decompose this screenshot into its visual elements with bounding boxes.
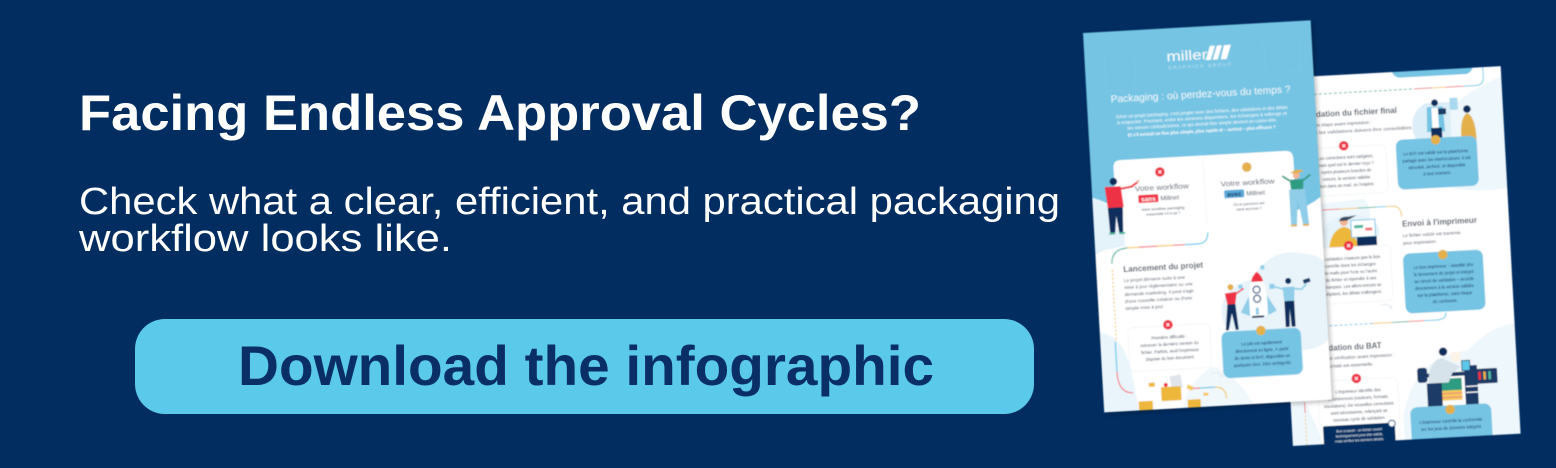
label: sans Millnet: Millnet: [1160, 194, 1180, 202]
arrow: [1210, 372, 1222, 377]
pale blobs: [1092, 196, 1125, 255]
section: lancement du projet: simple mise à jour.: [1125, 304, 1164, 311]
section: envoi a l'imprimeur: Le fichier validé est transmis: [1403, 230, 1461, 238]
section: validation du fichier final: toutes les validations doivent être consolidées.: [1303, 125, 1413, 136]
label: avec Millnet: [1224, 188, 1265, 199]
section: lancement du projet: d'une nouvelle création ou d'une: [1125, 295, 1193, 304]
section: lancement du projet: Le job est rapidement: [1241, 339, 1283, 347]
pale background blobs: [1321, 76, 1507, 248]
section: lancement du projet: du devis et BAT, disponible en: [1234, 353, 1291, 361]
section: validation du fichier final: Validation du fichier final: [1302, 105, 1397, 120]
front title: Packaging : où perdez-vous du temps ?: [1110, 84, 1291, 106]
dashed problem box: [1128, 323, 1212, 372]
illustration: man at laptop: [1328, 214, 1380, 248]
section: lancement du projet: fichier. Parfois, seul l'imprimeur: [1141, 347, 1199, 355]
icon: yellow badge: [1438, 250, 1448, 260]
navy callout: mais vérifiez les derniers détails.: [1335, 437, 1384, 444]
comparison card: Votre workflow: [1220, 177, 1276, 189]
label: sans Millnet: [1138, 193, 1180, 204]
comparison card: [1113, 150, 1297, 233]
section: lancement du projet: quelques clics. Zéro ambiguïté.: [1234, 360, 1292, 368]
comparison card: Votre workflow: [1135, 181, 1190, 193]
illustration: rocket: [1237, 265, 1277, 319]
section: envoi a l'imprimeur: La validation n'assure pas le bon: [1319, 254, 1381, 262]
section: lancement du projet: dispose du bon document.: [1146, 354, 1195, 362]
section: validation du fichier final: Les corrections sont ratégées,: [1317, 153, 1374, 161]
illustration: woman in red: [1223, 283, 1246, 330]
section: validation du fichier final: retours, la version validée: [1323, 174, 1371, 182]
section: validation du fichier final: mais quel est le dernier reçu ?: [1318, 160, 1375, 168]
logo: miller: [1166, 46, 1208, 64]
title: Facing Endless Approval Cycles?: [79, 85, 921, 141]
section: lancement du projet: Lancement du projet: [1123, 260, 1204, 274]
icon: yellow badge: [1256, 325, 1266, 336]
back page of infographic: [1290, 65, 1522, 447]
section: validation du BAT: L'imprimeur contrôle la conformité: [1419, 417, 1483, 425]
section: envoi a l'imprimeur: sur la plateforme, sans risque: [1417, 290, 1473, 298]
comparison card: ressemble-t-il à ça ?: [1146, 211, 1180, 217]
dashed problem box: [1319, 144, 1388, 196]
subtitle: Check what a clear, efficient, and practical packaging: [79, 181, 1060, 223]
section: envoi a l'imprimeur: directement à la version validée: [1415, 283, 1475, 291]
section: envoi a l'imprimeur: de confusion.: [1433, 298, 1458, 304]
section: lancement du projet: Le projet démarre suite à une: [1124, 275, 1186, 283]
section: lancement du projet: retrouver la dernière version du: [1140, 340, 1199, 348]
section: validation du fichier final: Après plusieurs boucles de: [1321, 167, 1372, 175]
blue solution box: [1221, 327, 1303, 379]
shadow of front page: [1085, 22, 1334, 414]
section: lancement du projet: [1123, 254, 1317, 411]
section: validation du BAT: [1318, 342, 1498, 446]
label: sans Millnet: sans: [1141, 196, 1156, 204]
subtitle: [78, 181, 1060, 260]
section: envoi a l'imprimeur: de mails pour l'une ou l'autre: [1324, 268, 1378, 276]
dashed problem box: [1324, 244, 1393, 304]
illustration: woman in green: [1282, 169, 1313, 227]
section: validation du BAT: L'imprimeur identifie des: [1335, 387, 1381, 395]
section: validation du BAT: incohérences (couleurs, formats,: [1328, 394, 1389, 402]
comparison card: Ou le parcours est: [1233, 201, 1265, 207]
label: avec Millnet: Millnet: [1246, 190, 1265, 198]
section: validation du BAT: Validation du BAT: [1314, 341, 1382, 354]
comparison card: Votre workflow packaging: [1141, 206, 1185, 212]
blue solution box: [1410, 403, 1494, 440]
white lower area: [1092, 185, 1332, 412]
section: validation du fichier final: Dernière étape avant impression :: [1302, 120, 1372, 128]
section: envoi a l'imprimeur: le lancement de projet et intégré: [1414, 269, 1474, 277]
section: envoi a l'imprimeur: du fichier et répondre à ses: [1325, 275, 1376, 283]
subtitle: workflow looks like.: [78, 218, 452, 260]
section: envoi a l'imprimeur: Envoi à l'imprimeur: [1402, 216, 1477, 229]
section: lancement du projet: Première difficulté :: [1151, 334, 1187, 341]
section: validation du fichier final: Le BAT est validé sur la plateforme,: [1403, 148, 1469, 157]
illustration: man in red pointing: [1104, 176, 1142, 235]
navy callout: [1323, 420, 1396, 448]
logo: GRAPHICS GROUP: [1168, 62, 1231, 70]
arrow: [1380, 304, 1392, 309]
top blue box remnant: [1392, 67, 1473, 78]
section: validation du BAT: sur les jeux de données intégrés: [1421, 424, 1481, 432]
timeline path: [1109, 232, 1227, 405]
illustration: man with tablet: [1274, 277, 1313, 328]
section: lancement du projet: mise à jour réglementaire ou une: [1124, 281, 1193, 290]
section: lancement du projet: directement en ligne. À partir: [1235, 346, 1289, 354]
download button: Download the infographic: [238, 334, 934, 397]
front page of infographic: [1083, 20, 1332, 412]
intro text: Et s'il existait un flux plus simple, plus rapide et – surtout – plus efficace ?: [1128, 124, 1276, 138]
icon: yellow badge: [1445, 404, 1455, 414]
icon: red cross: [1351, 373, 1361, 383]
timeline path: [1304, 66, 1484, 446]
section: envoi a l'imprimeur: [1324, 214, 1486, 314]
intro text: Gérer un projet packaging, c'est jongler avec des fichiers, des validations et des délais: [1116, 105, 1288, 119]
section: envoi a l'imprimeur: pour impression.: [1403, 239, 1437, 246]
section: validation du BAT: la conformité est essentielle.: [1316, 361, 1374, 370]
section: envoi a l'imprimeur: contrôle dans les échanges: [1325, 261, 1376, 269]
section: validation du BAT: nouveau cycle de validation.: [1333, 415, 1386, 423]
icon: red cross: [1339, 141, 1349, 151]
intro text: [1116, 105, 1289, 138]
section: validation du fichier final: sécurisé, archivé, et disponible: [1408, 162, 1466, 170]
comparison card: sans accrocs ?: [1236, 206, 1262, 212]
section: validation du fichier final: [1302, 97, 1479, 197]
section: validation du fichier final: à tout moment.: [1423, 170, 1451, 177]
section: envoi a l'imprimeur: au circuit de validation – accède: [1414, 276, 1475, 284]
intro text: à respecter. Pourtant, entre les versions dispersées, les échanges à rallonge et: [1117, 111, 1288, 125]
icon: yellow badge: [1242, 162, 1252, 172]
navy callout: Bon à savoir : un fichier ouvert: [1336, 427, 1382, 434]
section: validation du fichier final: dort dans un mail, on l'espère.: [1319, 181, 1375, 189]
blue solution box: [1396, 136, 1479, 190]
section: envoi a l'imprimeur: multiplient, les délais s'allongent.: [1321, 289, 1382, 297]
navy callout: techniquement peut être validé,: [1336, 432, 1383, 439]
icon: red cross: [1344, 241, 1354, 251]
download button: [135, 319, 1034, 414]
section: validation du BAT: résolutions). De nouvelles corrections: [1324, 400, 1394, 409]
section: envoi a l'imprimeur: Le bon imprimeur – identifié dès: [1414, 262, 1473, 270]
icon: red cross: [1163, 320, 1173, 330]
dashed problem box: [1318, 377, 1401, 444]
section: validation du BAT: Dernière vérification avant impression :: [1315, 352, 1395, 362]
illustration: printer operator: [1416, 346, 1498, 408]
icon: red cross: [1155, 167, 1165, 177]
icon: yellow badge: [1431, 135, 1441, 145]
section: validation du fichier final: partagé avec les interlocuteurs. Il est: [1402, 155, 1472, 164]
blue solution box: [1403, 249, 1486, 314]
label: avec Millnet: avec: [1227, 191, 1242, 199]
section: envoi a l'imprimeur: remarques. Les allers-retours se: [1321, 282, 1382, 290]
logo: [1166, 45, 1232, 70]
section: lancement du projet: demande marketing. Il peut s'agir: [1125, 288, 1194, 297]
illustration: envelopes: [1137, 373, 1209, 410]
section: validation du BAT: sont nécessaires, relançant un: [1331, 408, 1388, 416]
illustration: people reviewing: [1411, 97, 1477, 143]
intro text: les retours contradictoires, ce qui devrait être simple devient un casse-tête.: [1127, 117, 1277, 131]
faint die lines: [1104, 35, 1317, 150]
